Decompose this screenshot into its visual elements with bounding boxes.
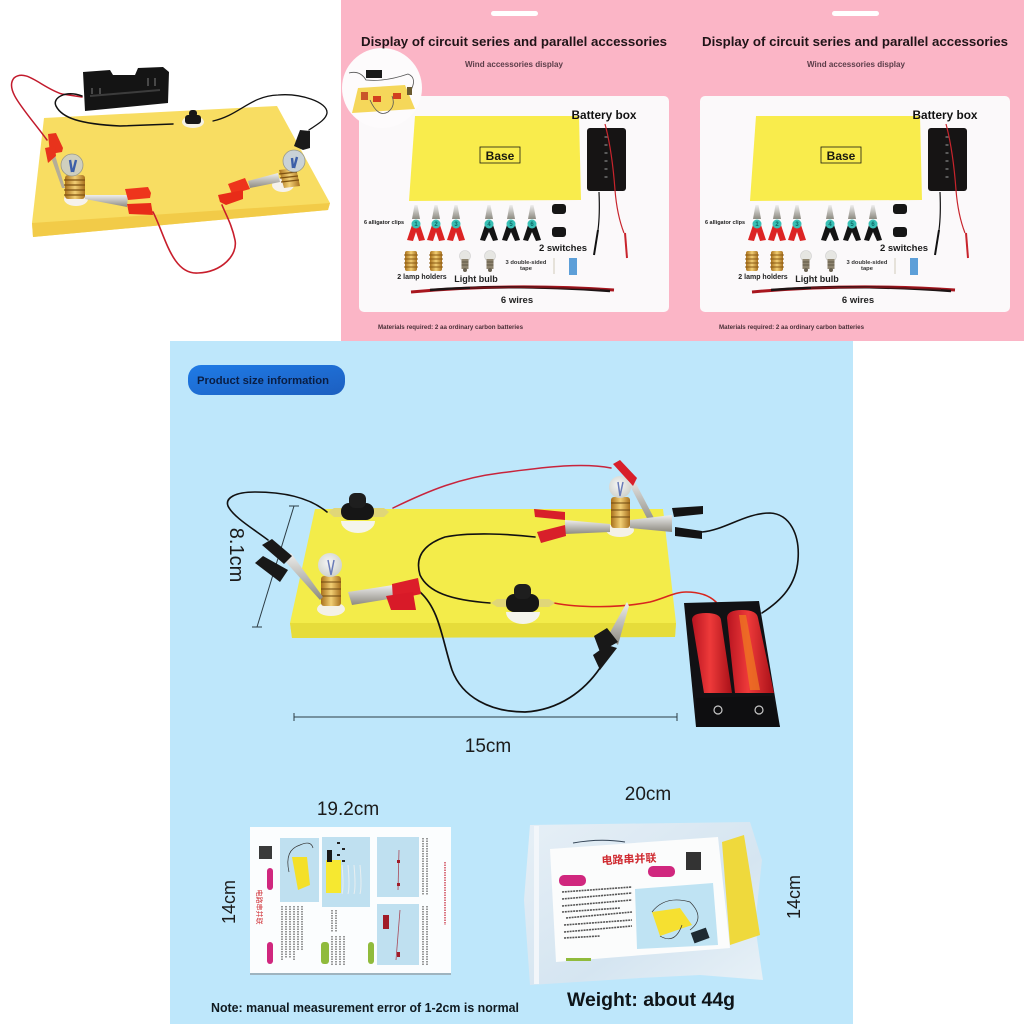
right lamp with clips [218, 130, 310, 205]
switch: rear [328, 493, 389, 533]
packaged kit in plastic bag [524, 822, 763, 985]
battery holder with two batteries [684, 601, 780, 727]
heading: Display of circuit series and parallel accessories [361, 34, 667, 49]
panel: product size information [170, 341, 853, 1024]
label: battery box: Battery box [572, 110, 637, 122]
instruction card [250, 827, 451, 975]
label: 20cm: 20cm [625, 784, 671, 805]
subheading: Wind accessories display [807, 59, 905, 69]
packaged kit in plastic bag: 电路串并联 [601, 851, 657, 867]
label: double-sided tape: tape [861, 266, 874, 272]
panel: accessories display right [682, 0, 1024, 341]
label: base [480, 147, 520, 163]
clip: red left [348, 578, 421, 610]
label: 14cm left: 14cm [219, 880, 239, 924]
note: materials: Materials required: 2 aa ordinary carbon batteries [719, 324, 864, 331]
switch: front [491, 584, 555, 624]
label: light bulb: Light bulb [454, 274, 498, 284]
wires [11, 75, 327, 273]
clip: red top [613, 460, 655, 524]
clip: black right [630, 506, 703, 539]
clip numbers: 3 [795, 222, 799, 228]
heading: Display of circuit series and parallel accessories [702, 34, 1008, 49]
label: base [821, 147, 861, 163]
clip numbers: 4 [828, 222, 832, 228]
clip: black front [593, 602, 629, 670]
wires [227, 465, 798, 712]
left lamp with clips [45, 133, 153, 215]
label: switches: 2 switches [880, 243, 928, 254]
label: double-sided tape: 3 double-sided [506, 260, 547, 266]
switch [182, 110, 204, 128]
note: Note: manual measurement error of 1-2cm is normal [211, 1001, 519, 1015]
clip numbers: 6 [871, 222, 875, 228]
clip: red right [534, 509, 610, 543]
label: switches: 2 switches [539, 243, 587, 254]
label: wires: 6 wires [501, 295, 533, 306]
clip numbers: 2 [775, 222, 779, 228]
label: wires: 6 wires [842, 295, 874, 306]
lamp: right [606, 476, 634, 537]
inset circle photo [342, 48, 422, 128]
instruction card: 电路串并联 [255, 890, 264, 924]
yellow base board [290, 509, 676, 638]
label: 8.1cm: 8.1cm [225, 528, 247, 582]
panel: assembled circuit photo [0, 0, 341, 341]
panel: accessories display left [341, 0, 682, 341]
clip numbers: 5 [509, 222, 513, 228]
clip: black left [255, 539, 323, 600]
header pill: Product size information [197, 375, 329, 387]
clip numbers: 4 [487, 222, 491, 228]
clip numbers: 1 [414, 222, 418, 228]
clip numbers: 3 [454, 222, 458, 228]
label: alligator clips: 6 alligator clips [364, 220, 404, 226]
subheading: Wind accessories display [465, 59, 563, 69]
lamp: left [317, 553, 345, 616]
label: lamp holders: 2 lamp holders [397, 274, 447, 281]
battery holder [83, 67, 169, 111]
label: base: Base [827, 149, 856, 163]
accessories artwork [700, 96, 1010, 312]
clip numbers: 5 [850, 222, 854, 228]
clip numbers: 6 [530, 222, 534, 228]
label: 15cm: 15cm [465, 736, 511, 757]
label: 14cm right: 14cm [784, 875, 804, 919]
label: double-sided tape: 3 double-sided [847, 260, 888, 266]
weight: Weight: about 44g [567, 990, 735, 1011]
accessories artwork [359, 96, 669, 312]
label: base: Base [486, 149, 515, 163]
hanger tab [491, 11, 538, 16]
label: lamp holders: 2 lamp holders [738, 274, 788, 281]
yellow base board [32, 106, 330, 237]
note: materials: Materials required: 2 aa ordinary carbon batteries [378, 324, 523, 331]
label: light bulb: Light bulb [795, 274, 839, 284]
clip numbers: 1 [755, 222, 759, 228]
header pill [188, 365, 345, 395]
label: battery box: Battery box [912, 110, 978, 122]
hanger tab [832, 11, 879, 16]
dimension: width bar [294, 713, 677, 721]
clip numbers: 2 [434, 222, 438, 228]
label: alligator clips: 6 alligator clips [705, 220, 745, 226]
dimension: depth bar [252, 506, 299, 627]
label: 19.2cm: 19.2cm [317, 799, 379, 820]
label: double-sided tape: tape [520, 266, 533, 272]
